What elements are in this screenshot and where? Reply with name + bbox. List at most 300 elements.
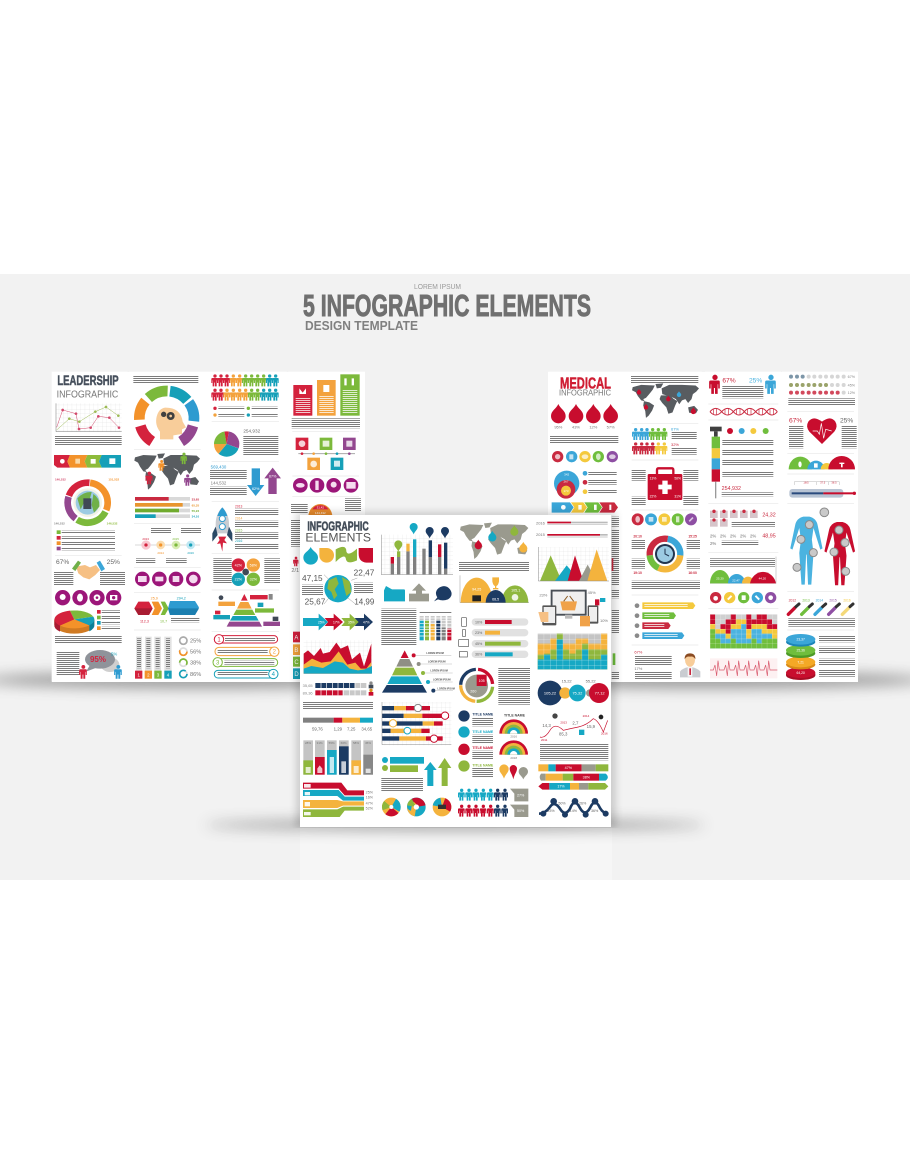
rocket legend <box>235 505 278 550</box>
arrows with figures <box>210 465 281 496</box>
hills chart: 25,30 <box>716 576 724 580</box>
main title: 5 INFOGRAPHIC ELEMENTS <box>303 288 591 323</box>
panel: centre second column <box>378 515 455 827</box>
building columns: 58% <box>353 741 359 745</box>
heart stat: 25% <box>840 418 853 425</box>
title list: TITLE NAME <box>472 763 494 767</box>
icon row <box>632 513 697 525</box>
gender stat: 67% <box>722 378 736 385</box>
gender stat <box>709 375 776 398</box>
globe stats: 25,67 <box>305 598 326 607</box>
people stats: 32% <box>671 442 679 447</box>
subtitle: DESIGN TEMPLATE <box>305 319 418 333</box>
device progress bars <box>459 618 528 658</box>
handshake stat: 67% <box>56 559 69 566</box>
ribbon chart: 52% <box>366 806 374 810</box>
trend line: 2014 <box>583 714 590 718</box>
trend line: 85,3 <box>559 731 568 736</box>
blood drops: 95% <box>554 425 563 430</box>
hills icons <box>789 456 855 469</box>
globe stats: 22,47 <box>354 568 375 577</box>
trend line: 2,7 <box>572 720 579 725</box>
chain infographic: 50% <box>558 802 566 806</box>
bubble row <box>538 679 609 705</box>
numbered pills: 3 <box>216 660 220 666</box>
progress bars: 65,35 <box>192 503 199 507</box>
devices with basket: 45% <box>588 590 596 595</box>
rainbow charts: TITLE NAME <box>504 714 526 718</box>
people rows <box>458 789 508 817</box>
gender stat: 25% <box>749 378 762 385</box>
nested circles: 173 <box>564 489 569 493</box>
pyramid labels <box>412 652 455 693</box>
heading: elements: ELEMENTS <box>305 530 371 544</box>
heading: infographic: INFOGRAPHIC <box>57 389 118 400</box>
droppers: 2012 <box>789 599 796 603</box>
segmented bar: 34,65 <box>361 726 373 731</box>
trend line: 2011 <box>541 738 548 742</box>
donut labels: 151,532 <box>108 478 119 482</box>
text block <box>631 375 698 383</box>
icon rows with numbers: 24,32 <box>762 512 776 518</box>
hidden row stat <box>291 557 299 574</box>
people stats <box>671 427 697 455</box>
hills chart: 44,20 <box>759 576 766 580</box>
icon rows with numbers: 2% <box>750 533 756 538</box>
rainbow charts: 2016 <box>510 735 517 739</box>
heat map <box>710 614 777 648</box>
pyramid labels: LOREM IPSUM <box>433 679 451 682</box>
device progress bars: 10% <box>475 620 483 624</box>
clock labels: 16:00 <box>688 571 697 575</box>
handshake stat: 25% <box>107 559 120 566</box>
ecg line <box>710 658 777 678</box>
icon row <box>293 478 358 493</box>
building columns: 28% <box>305 741 311 745</box>
stacked discs: 64,20 <box>796 671 805 675</box>
doctor stat: 17% <box>634 666 643 671</box>
numbered pills: 1 <box>217 637 221 643</box>
building columns: 45% <box>365 741 371 745</box>
ring with pie: 105 <box>479 679 485 683</box>
side text <box>612 517 619 680</box>
first aid kit: 58% <box>674 476 681 480</box>
icon row <box>135 572 201 586</box>
pie chart <box>218 435 236 453</box>
rainbow charts: 2018 <box>510 756 517 760</box>
progress rings: 38% <box>190 661 201 667</box>
bubble row: 77,12 <box>595 690 605 695</box>
pyramid labels: LOREM IPSUM <box>437 687 455 690</box>
panel: people, pie and pyramid <box>207 372 287 682</box>
icon trio <box>384 583 452 601</box>
ribbon chart: 16% <box>366 796 374 800</box>
partly hidden semicircle and notes <box>291 498 361 547</box>
text block <box>55 636 122 644</box>
timeline: 2014 <box>157 551 164 555</box>
figure text: 254,932 <box>243 428 261 433</box>
device progress bars: 45% <box>475 642 483 646</box>
legend <box>57 530 115 550</box>
text block <box>381 609 416 645</box>
white backing: left set <box>52 372 365 682</box>
white backing: centre panel <box>300 515 611 827</box>
pictogram bars: 89,36 <box>303 690 313 695</box>
overline: LOREM IPSUM <box>414 282 461 291</box>
quad circles <box>213 558 280 586</box>
numbered columns: 3 <box>157 672 160 677</box>
arrow chain: 35% <box>348 620 355 624</box>
organ icon row <box>552 451 618 462</box>
year bars: 2015 <box>536 532 546 537</box>
ring with pie: 260 <box>470 690 476 694</box>
blood drops <box>551 404 618 430</box>
three info boxes <box>293 374 360 416</box>
rocket legend: 2013 <box>235 505 243 509</box>
dot matrix: 45% <box>848 383 856 387</box>
handshake stat <box>54 559 125 585</box>
title list <box>458 710 494 778</box>
building columns: 66% <box>341 741 347 745</box>
rocket legend: 2015 <box>235 528 243 532</box>
numbered pills <box>213 635 279 679</box>
donut labels: 146,532 <box>55 478 66 482</box>
progress bars <box>135 497 199 519</box>
nested circles <box>554 471 617 499</box>
panel: head diagram and map <box>128 372 207 682</box>
trend line: 2013 <box>560 720 567 724</box>
trend line: 15,9 <box>587 724 596 729</box>
people rows <box>211 374 279 401</box>
donut chart <box>60 475 116 531</box>
hills chart <box>460 575 529 603</box>
hills chart <box>710 557 776 583</box>
percentage tags <box>510 789 528 817</box>
nested circles: 342 <box>564 472 569 476</box>
heading: medical: MEDICAL <box>560 375 611 392</box>
icon rows with numbers: 2% <box>710 533 716 538</box>
partly hidden semicircle and notes: 144,432 <box>315 511 326 515</box>
pyramid <box>382 650 427 693</box>
hills chart: 22,47 <box>732 578 740 582</box>
percentage tags: 50% <box>517 809 525 813</box>
clock labels: 19:10 <box>633 571 642 575</box>
process squares <box>296 438 356 470</box>
arrows with figures: 62% <box>252 487 260 491</box>
letter tags: B <box>294 648 298 654</box>
donut labels: 146,532 <box>54 521 65 525</box>
speech bubbles stat: 95% <box>90 655 106 664</box>
arrow chain: 17% <box>333 620 340 624</box>
kit notes <box>632 469 698 505</box>
panel: syringe and heat map <box>705 372 781 682</box>
building columns: 31% <box>317 741 323 745</box>
rocket <box>212 507 232 552</box>
numbered columns <box>135 637 172 679</box>
side slivers <box>612 558 615 665</box>
pyramid labels: LOREM IPSUM <box>426 652 444 655</box>
quad circles: 22% <box>235 578 243 582</box>
figure text <box>243 428 278 455</box>
thermometer <box>789 481 856 498</box>
quad circles: 58% <box>250 563 258 567</box>
panel: heart and bodies <box>782 372 858 682</box>
pyramid <box>213 594 280 627</box>
chain infographic: 36% <box>591 809 599 813</box>
text block <box>459 562 529 571</box>
arrow bars <box>635 602 695 639</box>
chain infographic: 26% <box>579 802 587 806</box>
stacked strips <box>538 764 608 790</box>
human bodies <box>790 508 855 585</box>
title list: TITLE NAME <box>472 730 494 734</box>
icon rows with numbers: 2% <box>730 533 736 538</box>
text block <box>540 744 608 760</box>
hills chart: 68,5 <box>492 597 499 601</box>
people rows <box>632 428 667 454</box>
pictogram bars <box>303 681 373 696</box>
stacked strips: 47% <box>565 766 573 770</box>
droppers: 2016 <box>843 599 851 603</box>
progress bars: 33,65 <box>192 497 199 501</box>
line chart <box>56 403 122 432</box>
bubble row: 55,22 <box>586 679 596 684</box>
icon row <box>55 590 121 605</box>
colour table <box>420 612 451 640</box>
stacked strips: 17% <box>557 785 565 789</box>
building columns <box>303 740 373 775</box>
text block <box>303 701 373 709</box>
people stats: 67% <box>671 427 679 432</box>
hidden row stat: 2/1 <box>291 568 299 574</box>
dna strand <box>710 408 777 415</box>
icon row <box>710 592 776 603</box>
segmented bar: 1,29 <box>334 726 343 731</box>
device progress bars: 23% <box>475 631 483 635</box>
world map <box>632 383 699 418</box>
triangle chart <box>538 547 609 581</box>
devices with basket <box>538 590 608 626</box>
hills chart: 105,1 <box>511 588 520 592</box>
thermometer: 38.5 <box>831 481 837 485</box>
three pies <box>385 800 448 814</box>
heart stat: 67% <box>789 418 802 425</box>
numbered pills: 4 <box>272 672 276 678</box>
rocket legend: 2016 <box>235 539 243 543</box>
3d arrows: 112,3 <box>140 619 149 623</box>
first aid kit: 13% <box>650 476 656 480</box>
panel: centre fourth column <box>533 515 611 827</box>
figure: 254,932 <box>722 486 741 492</box>
year bars <box>536 520 608 537</box>
progress bars: 55,22 <box>192 509 199 513</box>
donut labels: 146,532 <box>107 521 118 525</box>
first aid kit: 22% <box>650 494 656 498</box>
3d arrows <box>134 596 199 623</box>
icon rows with numbers: 2% <box>740 533 746 538</box>
pyramid labels: LOREM IPSUM <box>430 670 448 673</box>
icon rows with numbers: 2% <box>720 533 726 538</box>
arrow chain: 25% <box>318 620 325 624</box>
bubble row: 105,22 <box>544 690 557 695</box>
quad circles: 32% <box>250 578 258 582</box>
icon rows with numbers: 48,95 <box>762 534 776 540</box>
text block <box>133 375 198 384</box>
partly hidden semicircle and notes: 31,42 <box>317 505 324 509</box>
first aid kit: 31% <box>674 494 681 498</box>
droppers: 2013 <box>802 599 810 603</box>
icon rows with numbers <box>710 510 776 546</box>
text block <box>292 418 360 428</box>
pictogram bars: 35,65 <box>303 683 313 688</box>
title list: TITLE NAME <box>472 712 494 716</box>
trend line: 2016 <box>601 732 608 736</box>
progress rings <box>180 637 201 678</box>
arrow chain: 47% <box>363 620 370 624</box>
panel: leadership title and charts <box>52 372 127 682</box>
ribbon chart: 25% <box>366 791 374 795</box>
text block <box>788 398 855 406</box>
droppers <box>788 599 853 614</box>
figure <box>722 486 773 496</box>
world map <box>460 523 528 559</box>
clock labels <box>632 535 700 575</box>
devices with basket: 10% <box>600 618 608 623</box>
nested circles: 267 <box>564 480 569 484</box>
icon rows with numbers: 2% <box>710 541 716 546</box>
stacked strips: 38% <box>583 775 591 779</box>
header titles <box>303 282 591 333</box>
segmented bar: 59,76 <box>312 726 323 731</box>
bubble row: 15,22 <box>562 679 572 684</box>
letter tags: D <box>294 672 299 678</box>
syringe <box>710 427 722 498</box>
stacked discs <box>786 634 855 680</box>
text block <box>632 581 700 590</box>
droppers: 2014 <box>816 599 823 603</box>
dot matrix: 12% <box>848 391 856 395</box>
speech bubbles stat <box>57 650 122 679</box>
pin bar chart <box>381 523 453 575</box>
timeline: 2016 <box>187 551 194 555</box>
text block <box>550 435 618 444</box>
globe stats <box>302 568 375 607</box>
map pins <box>499 764 528 779</box>
numbered columns: 1 <box>137 672 140 677</box>
trend line: 14,3 <box>542 723 551 728</box>
donut labels <box>54 478 119 525</box>
text block <box>381 778 423 792</box>
3d pie <box>54 610 94 634</box>
arrow chain <box>303 614 373 630</box>
devices with basket: 23% <box>539 593 548 598</box>
centre panel shadow <box>296 512 616 828</box>
world map <box>134 453 200 490</box>
clock donut <box>645 534 685 574</box>
device progress bars: 36% <box>475 653 483 657</box>
numbered columns: 2 <box>147 672 150 677</box>
segmented bar: 7,25 <box>347 726 356 731</box>
rocket legend: 2014 <box>235 517 243 521</box>
droppers: 2015 <box>829 599 837 603</box>
letter tags <box>293 632 300 679</box>
bubble row: 75,32 <box>572 690 583 695</box>
globe stats: 14,99 <box>354 598 375 607</box>
gantt chart <box>382 702 451 745</box>
pyramid labels: LOREM IPSUM <box>428 661 446 664</box>
timeline: 2015 <box>172 537 179 541</box>
chain infographic: 23% <box>547 809 555 813</box>
floor shadows <box>0 672 910 830</box>
3d arrows: 25,9 <box>151 596 158 600</box>
segmented bar <box>303 718 373 731</box>
panel: boxes and process <box>288 372 365 682</box>
speech bubbles stat: 5% <box>111 651 117 656</box>
letter tags: C <box>294 660 299 666</box>
numbered pills: 2 <box>273 650 277 656</box>
building columns: 55% <box>329 741 335 745</box>
thermometer: 37.5 <box>820 481 826 485</box>
stacked heat chart <box>538 634 607 669</box>
rainbow charts <box>499 714 528 760</box>
chain infographic: 14% <box>570 809 578 813</box>
title list: TITLE NAME <box>472 746 494 750</box>
panel: medical title <box>548 372 625 682</box>
dot matrix: 67% <box>848 375 856 379</box>
bars and arrows <box>382 757 451 786</box>
white backing: right set <box>548 372 858 682</box>
clock labels: 15:25 <box>688 535 697 539</box>
colour shapes <box>303 547 373 565</box>
pie legend <box>97 610 120 630</box>
thermometer: 16/5 <box>803 481 809 485</box>
ring with pie <box>459 668 494 703</box>
quad circles: 42% <box>235 563 243 567</box>
heading: infographic: INFOGRAPHIC <box>559 388 611 397</box>
segmented ring <box>128 380 205 457</box>
timeline: 2013 <box>142 537 149 541</box>
arrows with figures: 569,430 <box>211 465 227 470</box>
progress bars: 34,10 <box>192 515 199 519</box>
panel: centre left column <box>300 515 378 827</box>
trend line <box>540 713 608 742</box>
first aid kit <box>648 468 682 500</box>
arrows with figures: 67% <box>269 474 277 478</box>
blood drops: 43% <box>572 425 580 430</box>
progress rings: 25% <box>190 639 201 645</box>
arrow row <box>552 502 618 513</box>
text block <box>788 618 855 627</box>
blood drops: 57% <box>607 425 615 430</box>
heart stat <box>789 418 857 448</box>
doctor stat: 67% <box>634 650 643 655</box>
numbered columns: 4 <box>167 672 170 677</box>
heading: leadership: LEADERSHIP <box>57 372 119 388</box>
area chart <box>304 640 372 674</box>
hills chart: 94,25 <box>472 587 481 591</box>
ribbon chart <box>303 783 374 817</box>
timeline <box>135 527 201 563</box>
chain infographic <box>539 798 609 818</box>
heading: infographic: INFOGRAPHIC <box>307 519 369 533</box>
stacked discs: 25,36 <box>796 649 805 653</box>
stacked discs: 7,21 <box>797 660 804 664</box>
progress rings: 56% <box>190 650 201 656</box>
percentage tags: 27% <box>517 793 525 797</box>
text block <box>498 667 530 705</box>
letter tags: A <box>294 635 298 641</box>
doctor stat <box>634 650 700 680</box>
